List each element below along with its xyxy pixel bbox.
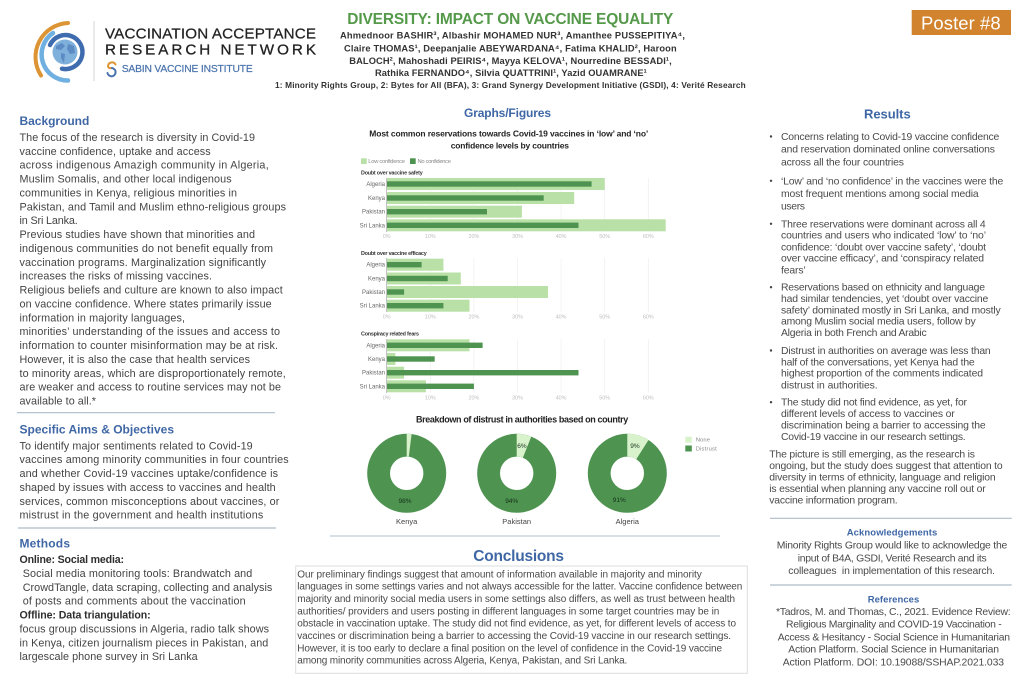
references text	[776, 607, 1011, 668]
background text: in Sri Lanka.	[20, 215, 78, 227]
offline methods	[20, 610, 270, 663]
donut: Pakistan: 6%	[517, 443, 527, 450]
online methods: of posts and comments about the vaccination	[23, 596, 246, 608]
conclusions box	[296, 566, 747, 673]
icon: Sabin S	[108, 62, 116, 76]
result bullet 4: safety’ dominated mostly in Sri Lanka, and mostly	[781, 305, 1001, 316]
donut charts title: Breakdown of distrust in authorities based on country	[416, 414, 628, 424]
legend: distrust: Distrust	[696, 447, 717, 453]
result bullet 1: and reservation dominated online conversations	[781, 145, 995, 156]
panel: background	[20, 114, 287, 408]
panel: donut charts	[379, 414, 717, 526]
acknowledgements text: colleagues in implementation of this research.	[788, 566, 995, 577]
background text: However, it is also the case that health services	[20, 354, 251, 366]
result bullet 3: fears’	[781, 265, 806, 276]
background text: vaccine confidence, uptake and access	[20, 146, 211, 158]
result bullet 4: Algeria in both French and Arabic	[781, 328, 927, 339]
background text: across indigenous Amazigh community in Algeria,	[20, 160, 269, 172]
authors: Rathika FERNANDO⁴, Silvia QUATTRINI¹, Yazid OUAMRANE¹	[375, 68, 647, 78]
bar chart: conspiracy related fears: 40%	[556, 395, 567, 401]
result bullet 3: confidence: ‘doubt over vaccine safety’, ‘doubt	[781, 242, 986, 253]
references text: *Tadros, M. and Thomas, C., 2021. Evidence Review:	[776, 607, 1011, 618]
bar chart: conspiracy related fears	[360, 332, 654, 401]
background text: information to counter misinformation may be at risk.	[20, 340, 278, 352]
bar chart: doubt over vaccine efficacy	[360, 251, 654, 321]
result bullet 5: distrust in authorities.	[781, 380, 878, 391]
conclusions text: vaccines or discrimination being a barrier to accessing the Covid-19 vaccine in our research settings.	[297, 631, 731, 642]
chart title	[369, 129, 648, 150]
bar chart: conspiracy related fears: Pakistan	[362, 371, 385, 377]
donut: Kenya	[379, 445, 435, 526]
heading: conclusions: Conclusions	[473, 548, 564, 565]
donut: Algeria: 9%	[630, 443, 640, 450]
bar chart: conspiracy related fears: Algeria	[366, 343, 386, 349]
bar chart: doubt over vaccine efficacy: Doubt over vaccine efficacy	[361, 251, 427, 257]
bar chart: conspiracy related fears: 30%	[512, 395, 523, 401]
donut: Pakistan: 94%	[505, 498, 518, 505]
result bullet 3: over vaccine efficacy’, and ‘conspiracy related	[781, 254, 984, 265]
background text	[20, 132, 287, 408]
bar chart: doubt over vaccine efficacy: 20%	[469, 315, 479, 321]
conclusions text: However, it is too early to declare a final position on the level of confidence in the Covid-19 vaccine	[297, 643, 722, 654]
result bullet 6: Covid-19 vaccine in our research settings.	[781, 432, 966, 443]
result bullet 1	[770, 132, 1000, 168]
result bullet 4: among Muslim social media users, follow by	[781, 317, 976, 328]
result bullet 5: Distrust in authorities on average was less than	[781, 346, 991, 357]
legend: distrust: None	[696, 438, 710, 444]
heading: graphs and figures: Graphs/Figures	[464, 106, 551, 120]
references text: Action Platform. Social Science in Humanitarian	[788, 645, 999, 656]
panel: specific aims and objectives	[20, 422, 289, 522]
result bullet 1: across all the four countries	[781, 157, 904, 168]
bar chart: conspiracy related fears: 20%	[469, 395, 479, 401]
bar chart: conspiracy related fears: Kenya	[368, 357, 386, 363]
bar chart: doubt over vaccine efficacy: Pakistan	[362, 290, 385, 296]
conclusions text: obstacle in vaccination uptake. The study did not find evidence, as yet, for different levels of access to	[297, 619, 736, 630]
result bullet 5	[770, 346, 991, 391]
bar chart: doubt over vaccine safety: 50%	[599, 234, 610, 240]
heading: references: References	[868, 594, 919, 605]
bar chart: doubt over vaccine safety: Kenya	[368, 196, 386, 202]
bar chart: doubt over vaccine efficacy: 0%	[383, 315, 391, 321]
aims text	[20, 440, 289, 522]
donut: Algeria	[599, 443, 655, 526]
bar chart: doubt over vaccine safety: Sri Lanka	[360, 223, 386, 229]
bar chart: doubt over vaccine efficacy: 40%	[556, 315, 567, 321]
authors: Claire THOMAS¹, Deepanjalie ABEYWARDANA⁴, Fatima KHALID², Haroon	[344, 44, 677, 54]
acknowledgements text	[777, 541, 1008, 577]
results closing paragraph: vaccine information program.	[769, 495, 898, 506]
aims text: services, common misconceptions about vaccines, or	[20, 496, 280, 508]
donut: Algeria: 91%	[613, 497, 626, 504]
online methods: Online: Social media:	[20, 554, 124, 566]
logo wordmark: VACCINATION ACCEPTANCE	[105, 25, 316, 42]
result bullet 4: Reservations based on ethnicity and language	[781, 283, 985, 294]
result bullet 6	[770, 398, 986, 443]
result bullet 3: countries and users who indicated ‘low’ to ‘no’	[781, 231, 986, 242]
legend: confidence: Low confidence	[368, 159, 405, 165]
bar chart: doubt over vaccine efficacy: 30%	[512, 315, 523, 321]
background text: indigenous communities do not benefit equally from	[20, 243, 273, 255]
offline methods: in Kenya, citizen journalism pieces in Pakistan, and	[20, 637, 268, 649]
references text: Religious Marginality and COVID-19 Vaccination -	[786, 620, 1002, 631]
bar chart: doubt over vaccine safety: 40%	[556, 234, 567, 240]
result bullet 4: had similar tendencies, yet ‘doubt over vaccine	[781, 294, 989, 305]
result bullet 2: most frequent mentions among social media	[781, 189, 979, 200]
donut: Algeria: Algeria	[616, 517, 640, 526]
background text: on vaccine confidence. Where states primarily issue	[20, 298, 272, 310]
result bullet 6: The study did not find evidence, as yet, for	[781, 398, 968, 409]
chart title: Most common reservations towards Covid-19 vaccines in ‘low’ and ‘no’	[369, 129, 648, 139]
logo wordmark	[105, 25, 316, 58]
authors: Ahmednoor BASHIR³, Albashir MOHAMED NUR³, Amanthee PUSSEPITIYA⁴,	[340, 31, 685, 41]
donut: Kenya: Kenya	[396, 517, 418, 526]
conclusions text	[297, 569, 742, 667]
donut: Kenya: 98%	[398, 498, 412, 505]
aims text: To identify major sentiments related to Covid-19	[20, 440, 253, 452]
bar chart: doubt over vaccine safety: Doubt over vaccine safety	[361, 170, 423, 176]
results closing paragraph: ongoing, but the study does suggest that attention to	[769, 461, 1003, 472]
references text: Access & Hesitancy - Social Science in Humanitarian	[778, 632, 1010, 643]
result bullet 2: ‘Low’ and ‘no confidence’ in the vaccines were the	[781, 176, 1004, 187]
authors: BALOCH², Mahoshadi PEIRIS⁴, Mayya KELOVA¹, Nourredine BESSADI¹,	[349, 56, 672, 66]
result bullet 6: discrimination being a barrier to accessing the	[781, 421, 986, 432]
result bullet 6: different levels of access to vaccines or	[781, 409, 955, 420]
background text: Religious beliefs and culture are known to also impact	[20, 285, 283, 297]
offline methods: largescale phone survey in Sri Lanka	[20, 651, 198, 663]
heading: acknowledgements: Acknowledgements	[847, 528, 937, 539]
donut: Pakistan: Pakistan	[502, 517, 531, 526]
legend: confidence	[361, 158, 451, 165]
result bullet 1: Concerns relating to Covid-19 vaccine confidence	[781, 132, 1000, 143]
results closing paragraph	[769, 450, 1003, 506]
background text: vaccination programs. Marginalization significantly	[20, 257, 267, 269]
icon: concentric arcs and globe	[36, 23, 82, 81]
bar chart: doubt over vaccine efficacy: 60%	[643, 315, 654, 321]
background text: minorities’ understanding of the issues and access to	[20, 326, 280, 338]
result bullet 5: highest proportion of the comments indicated	[781, 369, 983, 380]
result bullet 3	[770, 219, 986, 276]
heading: methods: Methods	[20, 536, 70, 550]
bar chart: conspiracy related fears: 50%	[599, 395, 610, 401]
logo: Vaccination Acceptance Research Network	[36, 21, 316, 81]
background text: to minority areas, which are disproportionately remote,	[20, 368, 286, 380]
background text: Pakistan, and Tamil and Muslim ethno-religious groups	[20, 201, 287, 213]
background text: Previous studies have shown that minorities and	[20, 229, 255, 241]
bar chart: doubt over vaccine safety: 10%	[425, 234, 436, 240]
header: title and authors	[275, 11, 746, 90]
bar chart: doubt over vaccine efficacy: 10%	[425, 315, 436, 321]
result bullet 2	[770, 176, 1004, 213]
affiliations: 1: Minority Rights Group, 2: Bytes for All (BFA), 3: Grand Synergy Development Initiative (GSDI), 4: Verité Research	[275, 80, 746, 90]
panel: methods	[20, 536, 273, 663]
bar chart: doubt over vaccine efficacy: Sri Lanka	[360, 304, 386, 310]
aims text: shaped by issues with access to vaccines and health	[20, 482, 276, 494]
conclusions text: languages in some settings varies and not always accessible for the latter. Vaccine confidence between	[297, 582, 742, 593]
bar chart: doubt over vaccine safety: 30%	[512, 234, 523, 240]
bar chart: doubt over vaccine safety: Pakistan	[362, 210, 385, 216]
offline methods: focus group discussions in Algeria, radio talk shows	[20, 623, 270, 635]
references text: Action Platform. DOI: 10.19088/SSHAP.2021.033	[783, 657, 1004, 668]
heading: background: Background	[20, 114, 89, 128]
panel: acknowledgements	[777, 528, 1008, 577]
heading: results: Results	[864, 106, 911, 121]
background text: available to all.*	[20, 396, 97, 408]
conclusions text: among minority communities across Algeria, Kenya, Pakistan, and Sri Lanka.	[297, 656, 627, 667]
background text: Muslim Somalis, and other local indigenous	[20, 174, 232, 186]
poster number badge: Poster #8	[921, 12, 1001, 33]
bar chart: conspiracy related fears: Conspiracy related fears	[361, 332, 419, 338]
conclusions text: majority and minority social media users in some settings also differs, as well as trust between health	[297, 594, 735, 605]
results closing paragraph: is essential when planning any vaccine roll out or	[769, 484, 986, 495]
background text: are weaker and access to routine services may not be	[20, 382, 281, 394]
bar chart: doubt over vaccine efficacy: Algeria	[366, 263, 386, 269]
bar chart: doubt over vaccine safety: 0%	[383, 234, 391, 240]
aims text: and whether Covid-19 vaccines uptake/confidence is	[20, 468, 279, 480]
bar chart: conspiracy related fears: 60%	[643, 395, 654, 401]
aims text: vaccines among minority communities in four countries	[20, 454, 289, 466]
result bullet 3: Three reservations were dominant across all 4	[781, 219, 986, 230]
heading: aims: Specific Aims & Objectives	[20, 422, 174, 436]
panel: conclusions	[296, 548, 747, 673]
panel: references	[776, 594, 1011, 668]
background text: information in majority languages,	[20, 312, 185, 324]
online methods	[20, 554, 273, 608]
result bullet 2: users	[781, 202, 805, 213]
legend: distrust	[685, 437, 717, 453]
donut: Pakistan	[489, 443, 545, 526]
result bullet 4	[770, 283, 1001, 339]
panel: results	[769, 106, 1004, 506]
aims text: mistrust in the government and health institutions	[20, 510, 264, 522]
bar chart: doubt over vaccine safety: Algeria	[366, 182, 386, 188]
online methods: CrowdTangle, data scraping, collecting and analysis	[23, 582, 273, 594]
bar chart: doubt over vaccine efficacy: 50%	[599, 315, 610, 321]
offline methods: Offline: Data triangulation:	[20, 610, 151, 622]
bar chart: conspiracy related fears: 10%	[425, 395, 436, 401]
logo wordmark: RESEARCH NETWORK	[105, 41, 316, 58]
bar chart: doubt over vaccine safety: 60%	[643, 234, 654, 240]
background text: increases the risks of missing vaccines.	[20, 271, 212, 283]
results closing paragraph: The picture is still emerging, as the research is	[769, 450, 975, 461]
bar chart: conspiracy related fears: 0%	[383, 395, 391, 401]
bar chart: doubt over vaccine safety	[360, 170, 666, 240]
results closing paragraph: diversity in terms of ethnicity, language and religion	[769, 472, 996, 483]
conclusions text: Our preliminary findings suggest that amount of information available in majority and minority	[297, 569, 702, 580]
legend: confidence: No confidence	[418, 159, 451, 165]
acknowledgements text: input of B4A, GSDI, Verité Research and its	[798, 553, 987, 564]
result bullet 5: half of the conversations, yet Kenya had the	[781, 357, 975, 368]
poster number badge	[912, 10, 1011, 35]
background text: The focus of the research is diversity in Covid-19	[20, 132, 255, 144]
conclusions text: authorities/ providers and users posting in different languages in some target countries may be in	[297, 606, 719, 617]
background text: communities in Kenya, religious minorities in	[20, 188, 237, 200]
authors	[340, 31, 685, 78]
acknowledgements text: Minority Rights Group would like to acknowledge the	[777, 541, 1008, 552]
title: DIVERSITY: IMPACT ON VACCINE EQUALITY	[347, 11, 674, 28]
Sabin Vaccine Institute: SABIN VACCINE INSTITUTE	[122, 64, 253, 75]
chart title: confidence levels by countries	[451, 140, 569, 150]
online methods: Social media monitoring tools: Brandwatch and	[23, 568, 252, 580]
bar chart: doubt over vaccine safety: 20%	[469, 234, 479, 240]
panel: bar charts	[360, 129, 666, 401]
bar chart: conspiracy related fears: Sri Lanka	[360, 384, 386, 390]
logo divider	[93, 21, 95, 81]
bar chart: doubt over vaccine efficacy: Kenya	[368, 276, 386, 282]
